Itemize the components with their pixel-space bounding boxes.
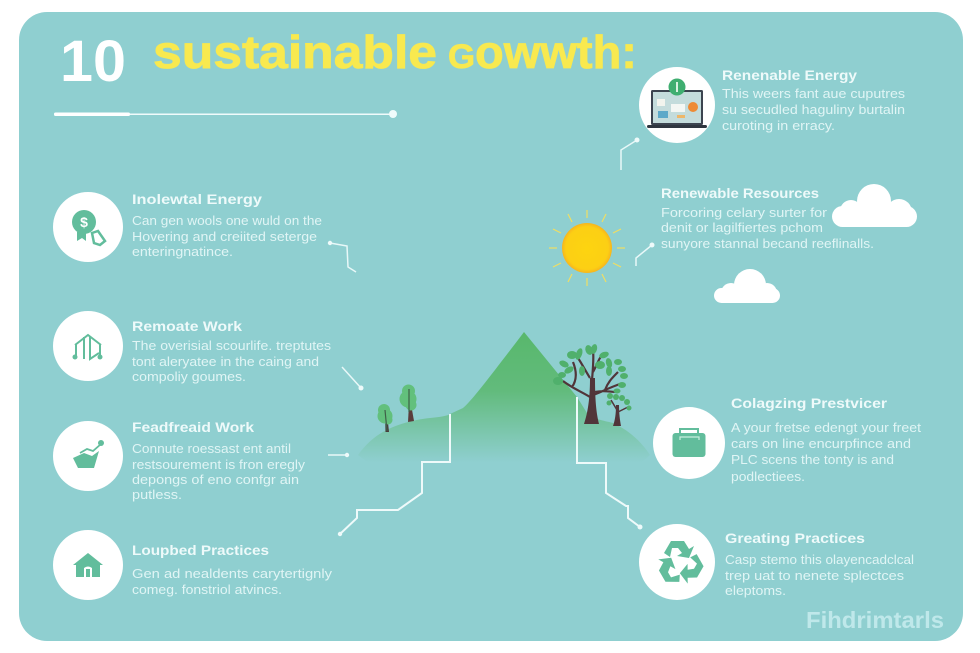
body text: putless. <box>132 488 182 502</box>
item: remote work <box>53 311 331 384</box>
icon: briefcase <box>653 407 725 479</box>
body text: A your fretse edengt your freet <box>731 421 922 435</box>
icon: basket with trend <box>53 421 123 491</box>
body text: tont aleryatee in the caing and <box>132 355 319 369</box>
body text: su secudled haguliny burtalin <box>722 103 905 117</box>
connector: right staircase <box>577 397 642 530</box>
mountain and hills <box>358 332 650 464</box>
body text <box>722 87 905 133</box>
body text: This weers fant aue cuputres <box>722 87 905 101</box>
body text: Forcoring celary surter for <box>661 206 827 220</box>
body text: Gen ad nealdents carytertignly <box>132 567 333 581</box>
body text: denit or lagilfiertes pchom <box>661 221 823 235</box>
heading: Renenable Energy <box>722 67 857 83</box>
heading: Renewable Resources <box>661 185 819 201</box>
body text: Casp stemo this olayencadclcal <box>725 553 914 567</box>
heading: Remoate Work <box>132 318 242 334</box>
icon: large tree <box>553 343 628 424</box>
item: incremental energy <box>53 191 322 262</box>
body text: Can gen wools one wuld on the <box>132 214 322 228</box>
icon: dollar badge <box>53 192 123 262</box>
body text: The overisial scourlife. treptutes <box>132 339 331 353</box>
body text: depongs of eno confgr ain <box>132 473 299 487</box>
connector: renewable resources <box>636 242 654 266</box>
title rule <box>54 110 397 118</box>
connector: remote work <box>342 367 364 390</box>
body text: sunyore stannal becand reeflinalls. <box>661 237 874 251</box>
body text: PLC scens the tonty is and <box>731 453 894 467</box>
item: colagzing prestvicer <box>653 395 922 484</box>
icon: sun <box>549 210 625 286</box>
body text: comeg. fonstriol atvincs. <box>132 583 282 597</box>
icon: large cloud <box>832 184 917 227</box>
body text <box>725 553 914 598</box>
body text: enteringnatince. <box>132 245 233 259</box>
body text <box>132 442 306 502</box>
body text: restsourement is fron eregly <box>132 458 306 472</box>
title: Gowwth: <box>448 26 637 78</box>
icon: dollar badge: $ <box>80 214 88 230</box>
icon: small trees <box>378 384 416 432</box>
body text: compoliy goumes. <box>132 370 246 384</box>
body text: podlectiees. <box>731 470 805 484</box>
heading: Loupbed Practices <box>132 542 269 558</box>
heading: Feadfreaid Work <box>132 419 254 435</box>
watermark logo text: Fihdrimtarls <box>806 607 944 633</box>
item: renewable energy <box>639 67 905 143</box>
connector: feadfreaid work <box>328 453 349 457</box>
body text: eleptoms. <box>725 584 786 598</box>
item: feadfreaid work <box>53 419 306 502</box>
body text <box>132 214 322 259</box>
heading: Colagzing Prestvicer <box>731 395 888 411</box>
connector: energy left <box>328 241 356 272</box>
body text: Hovering and creiited seterge <box>132 230 317 244</box>
heading: Greating Practices <box>725 530 865 546</box>
icon: small right tree <box>606 393 632 426</box>
item: greating practices <box>639 524 914 600</box>
icon: house <box>53 530 123 600</box>
body text: Connute roessast ent antil <box>132 442 291 456</box>
item: loupbed practices <box>53 530 333 600</box>
title: sustainable <box>153 26 437 78</box>
title: 10 <box>60 29 126 94</box>
connector: renewable energy <box>621 138 640 170</box>
body text: trep uat to nenete splectces <box>725 569 904 583</box>
icon: roof and scales <box>53 311 123 381</box>
icon: recycle <box>639 524 715 600</box>
body text <box>132 339 331 384</box>
item: renewable resources <box>661 185 874 251</box>
body text <box>661 206 874 251</box>
heading: Inolewtal Energy <box>132 191 262 207</box>
body text: curoting in erracy. <box>722 119 835 133</box>
connector: left staircase <box>338 414 450 536</box>
body text <box>132 567 333 597</box>
body text <box>731 421 922 484</box>
title <box>60 26 637 94</box>
icon: small cloud <box>714 269 780 303</box>
icon: laptop <box>639 67 715 143</box>
body text: cars on line encurpfince and <box>731 437 911 451</box>
